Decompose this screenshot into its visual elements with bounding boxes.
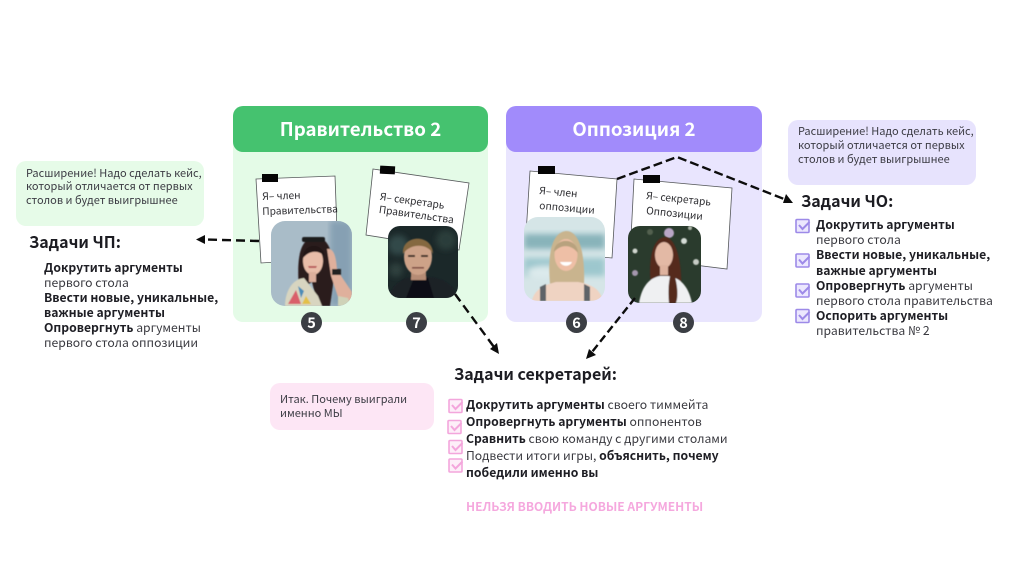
- note text: opposition member: Я– член: [539, 182, 578, 200]
- heading: Opposition 2: Оппозиция 2: [572, 115, 696, 142]
- number badge 8: [673, 312, 694, 333]
- note text: opposition secretary: Я– секретарь: [646, 187, 712, 209]
- text: secretary tasks list: победили именно вы: [466, 463, 598, 481]
- note: opposition secretary: [630, 175, 732, 269]
- text: opposition member tasks list: Оспорить аргументы: [816, 306, 948, 324]
- arrow: to secretary tasks from 7: [455, 294, 499, 354]
- text: opposition member tasks list: важные аргументы: [816, 261, 937, 279]
- callout: left extension note: который отличается от первых: [26, 178, 193, 194]
- callout: left extension note: столов и будет выигрышнее: [26, 192, 178, 208]
- text: secretary tasks list: [466, 395, 728, 481]
- heading: Government 2: Правительство 2: [280, 115, 441, 142]
- heading: Government 2: [233, 106, 488, 152]
- note text: opposition member: [539, 182, 595, 217]
- text: government member tasks list: Ввести новые, уникальные,: [44, 288, 218, 306]
- number badge 7: 7: [412, 312, 421, 333]
- callout: why we won: именно МЫ: [280, 405, 343, 421]
- text: opposition member tasks list: первого стола правительства: [816, 291, 993, 309]
- text: government member tasks list: первого стола оппозиции: [44, 333, 198, 351]
- note text: opposition secretary: Оппозиции: [646, 202, 704, 223]
- heading: Opposition 2: [506, 106, 762, 152]
- text: secretary tasks list: Сравнить свою команду с другими столами: [466, 429, 728, 447]
- text: government member tasks list: первого стола: [44, 273, 129, 291]
- number badge 6: [566, 312, 587, 333]
- note text: opposition member: оппозиции: [539, 197, 595, 217]
- number badge 5: 5: [307, 312, 316, 333]
- note text: government secretary: Правительства: [378, 201, 455, 226]
- note: opposition member: [525, 166, 617, 258]
- number badge 5: [301, 312, 322, 333]
- photo: woman, speaker 5: [271, 221, 352, 306]
- arrow: to government member tasks: [196, 235, 259, 244]
- text: secretary tasks list: Опровергнуть аргументы оппонентов: [466, 412, 702, 430]
- photo: woman, speaker 6: [524, 217, 605, 301]
- text: secretary tasks list: Докрутить аргументы своего тиммейта: [466, 395, 708, 413]
- panel: Government 2: [233, 130, 488, 322]
- text: government member tasks list: [44, 258, 218, 351]
- warning text: НЕЛЬЗЯ ВВОДИТЬ НОВЫЕ АРГУМЕНТЫ: [466, 498, 703, 515]
- text: government member tasks list: Докрутить аргументы: [44, 258, 183, 276]
- note text: opposition secretary: [646, 187, 712, 223]
- arrow: to opposition member tasks: [617, 157, 793, 203]
- text: opposition member tasks list: Докрутить аргументы: [816, 215, 955, 233]
- panel: Opposition 2: [506, 130, 762, 322]
- text: government member tasks list: Опровергнуть аргументы: [44, 318, 201, 336]
- number badge 6: 6: [572, 312, 581, 333]
- heading: secretary tasks: Задачи секретарей:: [454, 361, 617, 385]
- photo: woman, speaker 8: [628, 226, 701, 303]
- callout: right extension note: [788, 120, 976, 185]
- note: government member: [256, 174, 338, 263]
- heading: opposition member tasks: Задачи ЧО:: [801, 188, 893, 212]
- text: opposition member tasks list: [816, 215, 993, 339]
- text: opposition member tasks list: правительства № 2: [816, 321, 930, 339]
- callout: right extension note: который отличается от первых: [798, 137, 965, 153]
- arrow: to secretary tasks from 8: [586, 298, 635, 359]
- note text: government secretary: [378, 188, 455, 226]
- callout: why we won: [270, 383, 434, 430]
- callout: left extension note: [16, 161, 204, 226]
- callout: why we won: Итак. Почему выиграли: [280, 391, 407, 407]
- note text: government member: [262, 187, 338, 218]
- note text: government member: Я– член: [262, 187, 301, 203]
- heading: government member tasks: Задачи ЧП:: [29, 229, 121, 253]
- callout: right extension note: столов и будет выигрышнее: [798, 151, 950, 167]
- text: opposition member tasks list: Ввести новые, уникальные,: [816, 245, 990, 263]
- text: government member tasks list: важные аргументы: [44, 303, 165, 321]
- callout: right extension note: Расширение! Надо сделать кейс,: [798, 123, 974, 139]
- text: opposition member tasks list: Опровергнуть аргументы: [816, 276, 973, 294]
- number badge 8: 8: [679, 312, 688, 333]
- number badge 7: [406, 312, 427, 333]
- note text: government member: Правительства: [262, 200, 338, 218]
- photo: man, speaker 7: [388, 226, 458, 298]
- text: opposition member tasks list: первого стола: [816, 230, 901, 248]
- text: secretary tasks list: Подвести итоги игры, объяснить, почему: [466, 446, 719, 464]
- callout: left extension note: Расширение! Надо сделать кейс,: [26, 165, 202, 181]
- notes and photos artwork: [256, 166, 732, 306]
- note: government secretary: [366, 166, 469, 250]
- note text: government secretary: Я– секретарь: [379, 188, 446, 212]
